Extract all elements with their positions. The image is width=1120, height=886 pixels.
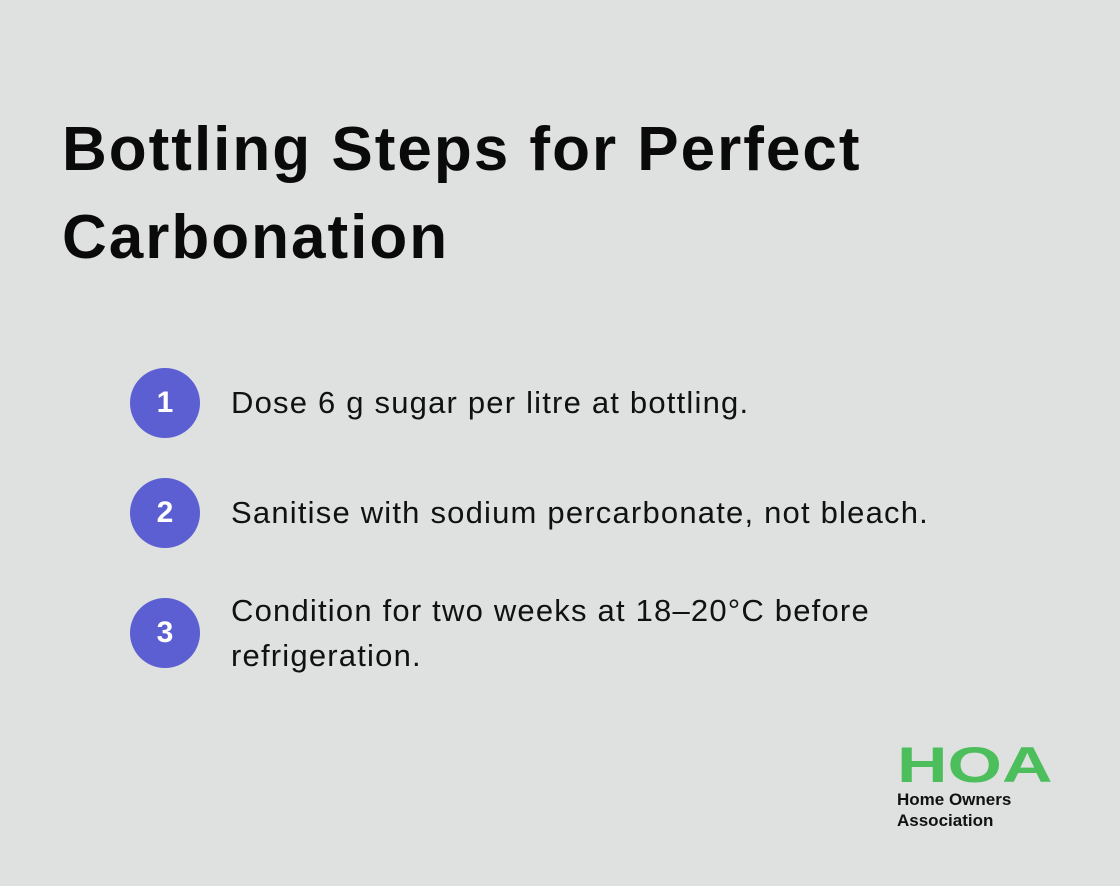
badge 1: 1 xyxy=(157,386,173,419)
badge 3 xyxy=(130,598,200,668)
text 3: Condition for two weeks at 18–20°C before xyxy=(231,593,870,628)
logo: HOA xyxy=(897,737,1053,793)
badge 1 xyxy=(130,368,200,438)
logo: Home Owners xyxy=(897,790,1011,809)
title: Bottling Steps for Perfect xyxy=(62,115,862,184)
title xyxy=(62,115,862,272)
badge 2: 2 xyxy=(157,496,173,529)
logo: Association xyxy=(897,811,993,830)
text 1: Dose 6 g sugar per litre at bottling. xyxy=(231,385,749,420)
text 3 xyxy=(231,593,870,673)
step 2 xyxy=(130,478,929,548)
text 3: refrigeration. xyxy=(231,638,422,673)
badge 3: 3 xyxy=(157,616,173,649)
title: Carbonation xyxy=(62,203,449,272)
text 2: Sanitise with sodium percarbonate, not bleach. xyxy=(231,495,929,530)
badge 2 xyxy=(130,478,200,548)
step 3 xyxy=(130,593,870,673)
step 1 xyxy=(130,368,749,438)
logo xyxy=(897,737,1053,830)
